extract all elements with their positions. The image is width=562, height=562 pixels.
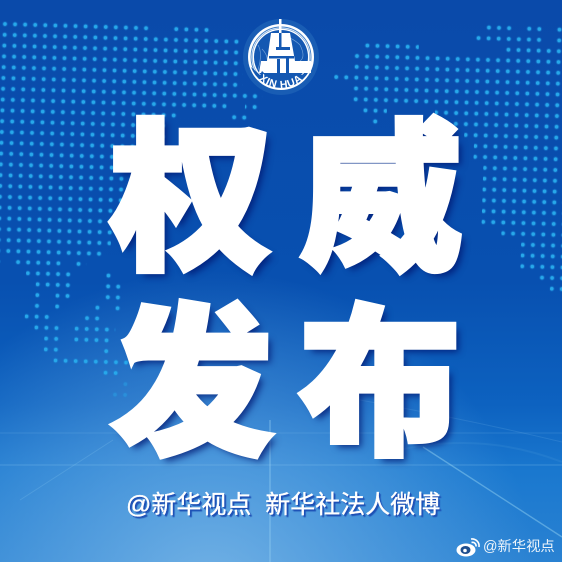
icon: weibo [456, 538, 480, 556]
subtitle: @新华视点 新华社法人微博 [126, 491, 440, 519]
heading: 布: 布 [299, 295, 461, 476]
heading: 威: 威 [300, 110, 462, 291]
dotted map: eastern landmass [328, 18, 562, 295]
heading: 权: 权 [110, 110, 272, 291]
dotted map: western landmass [0, 18, 264, 404]
emblem rings [243, 19, 319, 95]
watermark text: @新华视点 [483, 539, 555, 555]
heading: 发: 发 [111, 295, 273, 476]
light rays and horizon lines [0, 400, 562, 562]
logo: Xinhua emblem [243, 19, 319, 95]
watermark [456, 538, 555, 556]
tower mark [259, 19, 311, 73]
emblem text: XIN HUA [259, 74, 302, 88]
